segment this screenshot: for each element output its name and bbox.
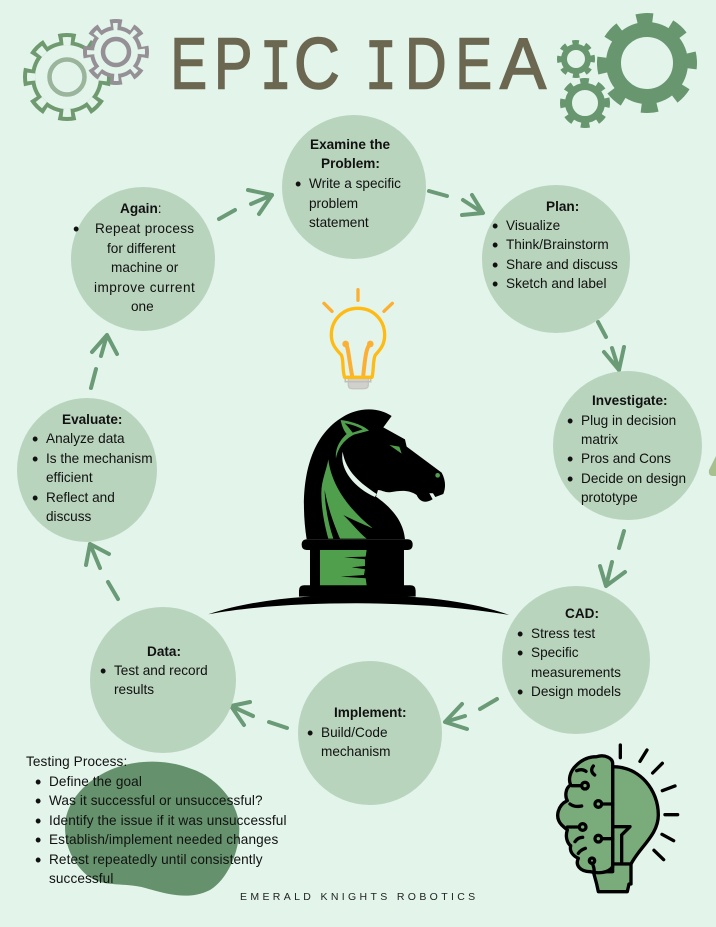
text block: testing process: Testing Process:	[26, 754, 127, 769]
panel: investigate: •	[567, 469, 573, 489]
panel: plan: Plan:	[546, 199, 579, 214]
panel: again: Repeat process	[95, 221, 194, 236]
panel: evaluate: discuss	[46, 509, 91, 524]
text block: testing process: Was it successful or unsuccessful?	[49, 793, 263, 808]
panel: cad: Specific	[531, 645, 579, 660]
right edge shape	[709, 456, 716, 476]
panel: again: •	[73, 219, 79, 239]
panel: plan: •	[492, 274, 498, 294]
panel: again: improve current	[94, 280, 195, 295]
panel: plan	[482, 185, 630, 333]
neck highlight slit	[342, 452, 377, 497]
bulb screw base	[593, 864, 631, 892]
icon: brain light bulb	[558, 745, 678, 892]
panel: implement: Build/Code	[321, 725, 388, 740]
logo: chess knight	[208, 409, 509, 615]
title	[170, 23, 546, 111]
panel: implement: mechanism	[321, 744, 391, 759]
panel: implement: •	[307, 723, 313, 743]
panel: examine the problem: problem	[309, 196, 358, 211]
arrow: evaluate to again	[91, 335, 117, 388]
panel: cad: •	[517, 682, 523, 702]
panel: evaluate: •	[32, 488, 38, 508]
panel: again: Again:	[120, 201, 162, 216]
title: A	[500, 23, 546, 104]
panel: cad: •	[517, 624, 523, 644]
panel: evaluate: Analyze data	[46, 431, 125, 446]
panel: evaluate: efficient	[46, 470, 93, 485]
panel: cad: Design models	[531, 684, 621, 699]
circuit lines	[567, 766, 630, 873]
panel: evaluate	[17, 398, 157, 542]
text block: testing process: •	[35, 791, 41, 811]
icon: outline grey gear	[88, 24, 144, 80]
nostril	[435, 473, 440, 478]
title: I	[260, 30, 292, 111]
panel: data: Test and record	[114, 663, 208, 678]
panel: data: results	[114, 682, 154, 697]
knight head and neck	[304, 409, 445, 539]
panel: data	[90, 607, 236, 753]
panel: cad: Stress test	[531, 626, 595, 641]
panel: again	[71, 187, 215, 331]
title: P	[214, 23, 252, 104]
panel: examine the problem: Problem:	[321, 156, 380, 171]
panel: evaluate: Is the mechanism	[46, 451, 153, 466]
panel: cad: •	[517, 643, 523, 663]
panel: implement: Implement:	[334, 705, 407, 720]
green ear	[336, 420, 369, 458]
panel: implement	[298, 661, 442, 805]
panel: cad: measurements	[531, 665, 621, 680]
panel: evaluate: Evaluate:	[62, 412, 122, 427]
arrow: plan to investigate	[598, 322, 624, 370]
icon: outline green gear	[29, 39, 105, 115]
icon: light bulb	[324, 290, 392, 389]
text block: testing process	[26, 754, 287, 886]
icon: small solid gear top	[560, 42, 592, 76]
panel: data: •	[100, 661, 106, 681]
green mane	[321, 459, 373, 539]
text block: testing process: successful	[49, 871, 113, 886]
panel: plan: •	[492, 255, 498, 275]
title: E	[456, 23, 492, 104]
panel: evaluate: Reflect and	[46, 490, 115, 505]
panel: investigate: Investigate:	[592, 393, 668, 408]
panel: investigate: matrix	[581, 432, 618, 447]
brain half	[558, 756, 613, 873]
panel: plan: Visualize	[506, 218, 560, 233]
title: E	[170, 23, 207, 104]
text block: testing process: •	[35, 850, 41, 870]
knight base	[299, 539, 416, 597]
text block: testing process: •	[35, 811, 41, 831]
panel: plan: •	[492, 216, 498, 236]
footer: EMERALD KNIGHTS ROBOTICS	[240, 891, 479, 903]
panel: investigate: •	[567, 449, 573, 469]
panel: evaluate: •	[32, 449, 38, 469]
panel: examine the problem: •	[295, 174, 301, 194]
arrow: examine to plan	[429, 191, 483, 215]
text block: testing process: Establish/implement needed changes	[49, 832, 278, 847]
panel: investigate: Pros and Cons	[581, 451, 671, 466]
title: D	[405, 23, 447, 104]
bulb half	[613, 767, 658, 864]
testing process blob	[65, 762, 239, 896]
title: C	[294, 25, 340, 104]
glow rays	[620, 745, 678, 860]
panel: data: Data:	[147, 644, 181, 659]
ground arc	[208, 595, 509, 615]
panel: examine the problem: Examine the	[310, 137, 390, 152]
icon: small solid gear bottom	[563, 81, 607, 125]
arrow: investigate to cad	[600, 531, 625, 586]
text block: testing process: •	[35, 772, 41, 792]
panel: again: one	[131, 299, 154, 314]
panel: examine the problem: statement	[309, 215, 369, 230]
panel: plan: Sketch and label	[506, 276, 607, 291]
green base panel	[320, 550, 367, 585]
panel: plan: •	[492, 235, 498, 255]
arrow: data to evaluate	[86, 544, 118, 599]
icon: large solid gear	[601, 17, 693, 109]
text block: testing process: Retest repeatedly until consistently	[49, 852, 263, 867]
arrow: cad to implement	[445, 699, 497, 729]
panel: examine the problem: Write a specific	[309, 176, 401, 191]
panel: again: for different	[107, 241, 176, 256]
panel: examine the problem	[282, 115, 426, 259]
panel: investigate: Plug in decision	[581, 413, 676, 428]
panel: plan: Think/Brainstorm	[506, 237, 609, 252]
text block: testing process: Identify the issue if it was unsuccessful	[49, 813, 287, 828]
panel: investigate: Decide on design	[581, 471, 686, 486]
text block: testing process: •	[35, 830, 41, 850]
text block: testing process: Define the goal	[49, 774, 142, 789]
title: I	[365, 30, 397, 111]
panel: investigate: •	[567, 411, 573, 431]
arrow: again to examine	[219, 190, 272, 219]
panel: investigate	[553, 371, 702, 520]
panel: evaluate: •	[32, 429, 38, 449]
green eye	[389, 445, 402, 454]
panel: cad: CAD:	[565, 606, 599, 621]
arrow: implement to data	[231, 702, 287, 728]
panel: plan: Share and discuss	[506, 257, 618, 272]
panel: investigate: prototype	[581, 490, 638, 505]
panel: again: machine or	[111, 260, 178, 275]
panel: cad	[502, 586, 650, 734]
